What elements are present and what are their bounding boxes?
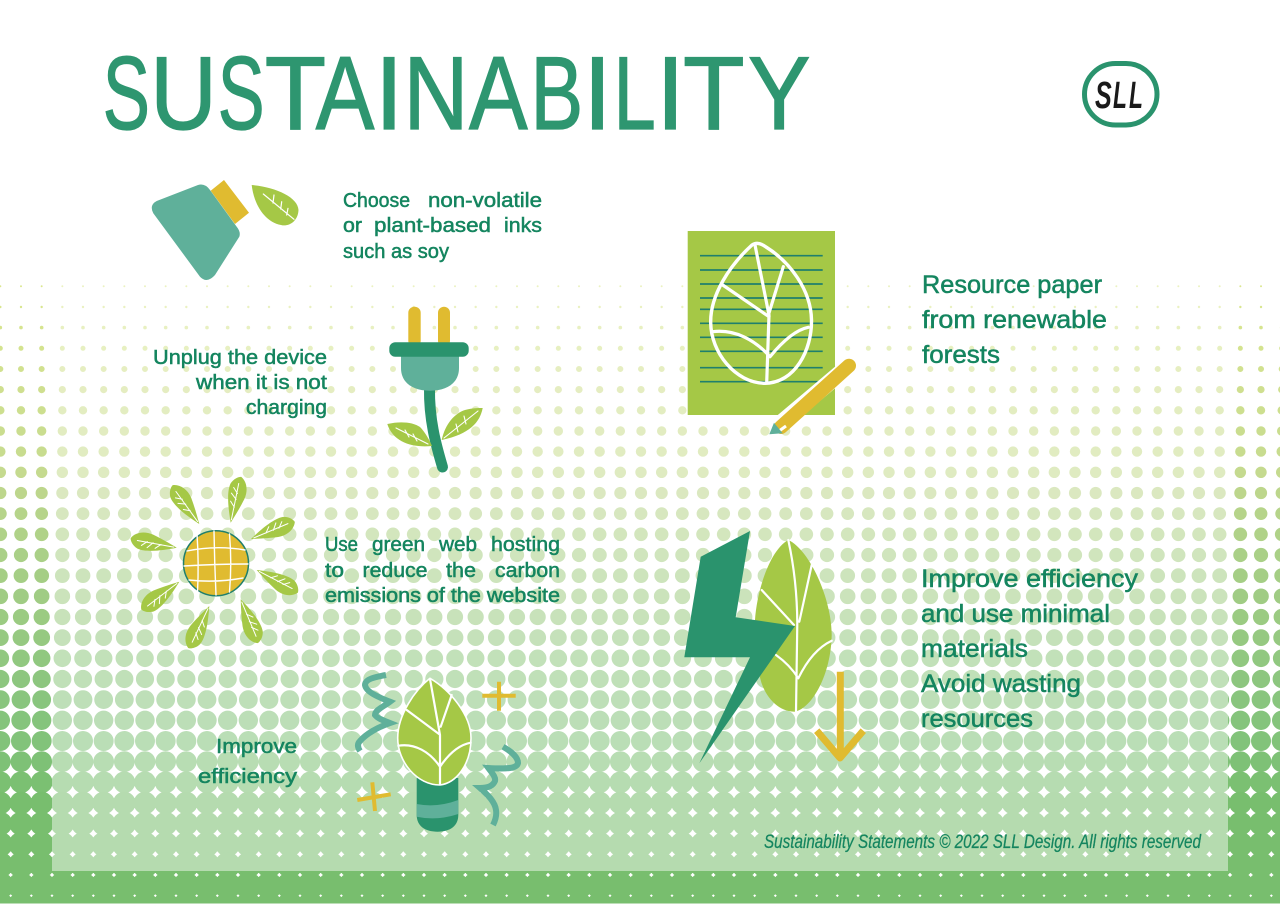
text: unplug: charging xyxy=(246,397,327,419)
title: N xyxy=(404,35,468,151)
text: unplug: when it is not xyxy=(195,372,327,394)
text: green hosting: Use xyxy=(325,534,358,556)
translucent inner panel xyxy=(52,270,1228,871)
text: green hosting: hosting xyxy=(491,534,560,556)
logo: L xyxy=(1113,74,1127,116)
text: unplug: Unplug the device xyxy=(153,347,327,369)
icon: leaf bulb xyxy=(357,675,518,832)
title: T xyxy=(265,34,326,151)
text: paper xyxy=(922,271,1107,369)
icon: bolt with leaf and arrow xyxy=(684,531,863,763)
halftone dot background xyxy=(0,286,1280,905)
title: T xyxy=(683,35,745,151)
title: A xyxy=(469,36,528,152)
title: L xyxy=(614,36,656,152)
text: inks: or xyxy=(343,215,362,237)
text: paper: Resource paper xyxy=(922,271,1102,299)
text: green hosting: the xyxy=(446,560,476,582)
text: unplug xyxy=(153,347,327,419)
text: improve efficiency right: Avoid wasting xyxy=(921,670,1081,698)
text: inks: Choose xyxy=(343,190,410,212)
text: green hosting: carbon xyxy=(495,560,560,582)
icon: paper with leaf and pencil xyxy=(688,231,849,434)
logo: L xyxy=(1129,74,1143,116)
text: improve efficiency right: and use minimal xyxy=(921,600,1110,628)
title xyxy=(103,34,810,152)
icon: plug with leaves xyxy=(387,307,483,467)
text: improve efficiency right: materials xyxy=(921,635,1028,663)
title: I xyxy=(375,36,404,152)
icon: sun of leaves xyxy=(129,475,302,652)
title: B xyxy=(530,34,583,152)
title: I xyxy=(583,36,612,152)
title: I xyxy=(656,36,685,152)
text: improve efficiency left xyxy=(198,736,297,788)
text: paper: forests xyxy=(922,341,1000,369)
text: inks: plant-based xyxy=(374,215,491,237)
title: S xyxy=(103,34,150,151)
text: inks: non-volatile xyxy=(428,190,542,212)
title: A xyxy=(316,36,375,152)
text: improve efficiency right xyxy=(921,565,1139,733)
logo xyxy=(1084,64,1157,125)
text: inks: inks xyxy=(504,215,542,237)
text: improve efficiency right: resources xyxy=(921,705,1033,733)
text: inks: such as soy xyxy=(343,241,449,263)
text: green hosting: emissions of the website xyxy=(325,585,560,607)
title: U xyxy=(150,35,217,151)
text: green hosting xyxy=(325,534,560,607)
text: paper: from renewable xyxy=(922,306,1107,334)
title: S xyxy=(218,35,265,151)
text: green hosting: reduce xyxy=(362,560,428,582)
text: inks xyxy=(343,190,542,263)
text: improve efficiency right: Improve efficiency xyxy=(921,565,1139,593)
title: Y xyxy=(748,34,810,151)
text: green hosting: to xyxy=(325,560,344,582)
text: green hosting: web xyxy=(438,534,477,556)
icon: ink bottle with leaf xyxy=(152,180,298,280)
logo: S xyxy=(1095,74,1112,116)
text: improve efficiency left: Improve xyxy=(216,736,297,758)
text: green hosting: green xyxy=(372,534,425,556)
text: improve efficiency left: efficiency xyxy=(198,766,297,788)
